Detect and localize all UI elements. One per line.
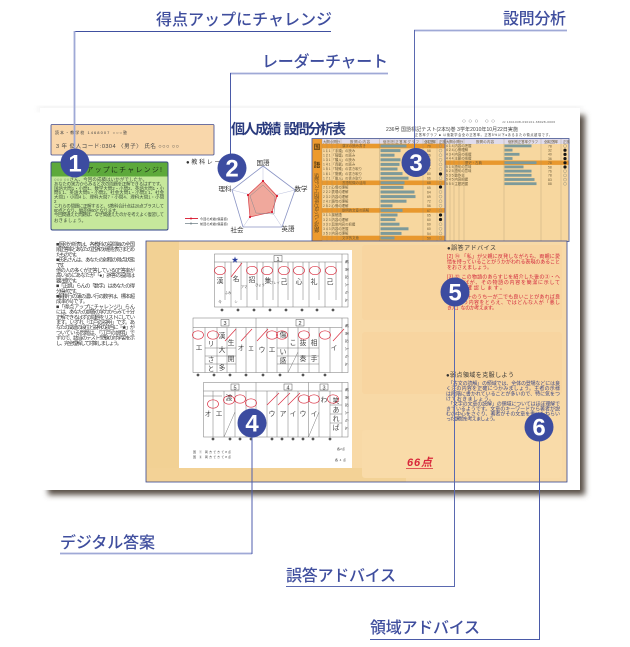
- callout: area advice: 領域アドバイス: [370, 614, 480, 638]
- radar chart: [218, 159, 308, 234]
- answer table: row 1: [214, 254, 350, 311]
- right table: scores: 88: [548, 182, 552, 186]
- panel: score-up challenge: 2: [54, 199, 57, 204]
- radar chart: 数学: [294, 184, 308, 193]
- left table: scores: 56: [427, 204, 431, 208]
- badge 4: [238, 408, 266, 438]
- answer table: row 3: あ: [333, 406, 340, 414]
- panel: score-up challenge: 問5 1、英語大問5・小問2、社会大問1・小問3 1、社会: [54, 189, 165, 196]
- panel: score-up challenge: 国語大問1・小問1、数学大問2・小問2、英語大問1・小: [54, 185, 165, 192]
- panel: student info: 読本・教学校 1468007 ○○○塾: [55, 129, 127, 135]
- panel: question analysis table: 正誤: [563, 139, 570, 144]
- right table: question rows: 4 4 4 主題の把握: [446, 156, 472, 161]
- answer table: row 2: 多: [219, 363, 226, 372]
- right table: scores: 32: [548, 148, 552, 152]
- left table: question rows: 2 2 2 表現の理解: [323, 189, 349, 194]
- left table: scores: 69: [427, 195, 431, 199]
- answer table: row 2: 傷: [280, 330, 287, 339]
- panel: question analysis table: 大問小問分: [323, 139, 341, 144]
- right table: question rows: 4 3 4 内容の把握: [446, 151, 472, 156]
- answer table: row 2: 大: [219, 345, 226, 354]
- header: student and test info: 正答率グラフ ■ 以後数学会全の正答率。正答5%以下●あるまたの領点超項です。: [415, 132, 552, 137]
- answer table: row 3: わ: [321, 396, 328, 404]
- left table: scores: 74: [427, 163, 431, 167]
- panel: score-up challenge: 今回間違えた問題は、なぜ間違えたのかを考えよく復習して: [54, 211, 164, 218]
- panel: question analysis table: 個別別正答率グラフ: [383, 139, 419, 144]
- panel: score-up challenge: 得点アップにチャレンジ!: [70, 165, 162, 174]
- left table: scores: [427, 144, 431, 240]
- text block: wrong-answer advice: き人」なのか考えます。: [447, 304, 497, 312]
- right table: scores: 78: [548, 161, 552, 165]
- left table: question rows: 文学的文章: [342, 235, 360, 240]
- text block: weak area advice: った課題を考えましょう。: [446, 416, 498, 422]
- panel: score-up challenge: [51, 162, 168, 230]
- radar chart: 理科: [218, 184, 232, 193]
- badge 5: 5: [448, 280, 462, 306]
- answer table: row 1: シ: [234, 300, 238, 304]
- panel: question analysis table: 個別別正答率グラフ: [508, 139, 538, 144]
- panel: question analysis table: 技能テスト正答率と知っている語彙: [313, 173, 320, 233]
- answer table: row 1: 心: [296, 277, 303, 286]
- answer table: row 3: 4: [286, 385, 290, 391]
- callout: area advice: [370, 430, 540, 640]
- right table: right or wrong marks: [563, 144, 567, 185]
- answer table: row 2: ウ: [259, 346, 265, 354]
- callout: question analysis: 設問分析: [503, 5, 566, 29]
- answer table: row 2: 手: [311, 354, 318, 363]
- text block: how to read the report: 順正答率とあなたの正誤の状態を表さまとめ: [56, 245, 135, 253]
- badge 3: [402, 148, 430, 177]
- left table: question rows: 3 4 3 内容の把握: [323, 226, 349, 231]
- text block: weak area advice: けておきましょう。: [446, 396, 494, 402]
- answer table: row 2: と: [208, 365, 214, 373]
- text block: wrong-answer advice: [3] ⑫ この物語のあらすじを紹介した後の③・へ: [447, 274, 560, 280]
- left table: scores: 67: [427, 209, 431, 213]
- badge 5: [440, 278, 470, 306]
- answer sheet notes: 各2点: [337, 446, 345, 451]
- panel: question analysis table: 正誤: [439, 139, 446, 144]
- badge 6: [524, 412, 554, 442]
- left table: score bars: [380, 144, 416, 240]
- left table: scores: 60: [427, 218, 431, 222]
- answer table: row 3: ア: [280, 410, 287, 418]
- left table: question rows: 1 6 1 「警察」の書き取り: [323, 171, 362, 176]
- answer table: row 1: 己: [327, 278, 334, 286]
- text block: how to read the report: なたの間違の段位と説明の該当に「★」が: [56, 323, 136, 331]
- callout: wrong-answer advice: [286, 295, 454, 586]
- badge 1: 1: [68, 150, 82, 178]
- text block: wrong-answer advice: 情を持っていることがうかがわれる表現のあること: [447, 258, 560, 266]
- answer sheet notes: [193, 446, 346, 462]
- answer table: row 2: 抜: [300, 338, 307, 347]
- answer table: row 2: 奏: [300, 354, 307, 363]
- answer table: row 1: 今: [218, 299, 222, 304]
- panel: question analysis table: 語: [314, 161, 321, 169]
- left table: scores: 60: [427, 223, 431, 227]
- text block: how to read the report: ■「正誤」らんの「数字」はあなたの得: [56, 282, 136, 290]
- answer table: row 1: ★: [232, 256, 238, 264]
- right table: question rows: 4 2 4 心情理解: [446, 147, 469, 152]
- answer table: row 2: 感: [280, 356, 287, 365]
- left table: question rows: 1 2 1 「隔壁」の読み: [323, 152, 356, 157]
- text block: wrong-answer advice: をおさえましょう。: [447, 264, 492, 271]
- answer table: row 2: オ: [238, 344, 245, 352]
- right table: scores: [548, 144, 552, 186]
- answer table: row 3: エ: [216, 411, 223, 418]
- panel: score-up challenge: 大問1・小問4 1、理科大問7・小問4、理科大問1・小問: [54, 194, 165, 201]
- answer table: row 2: エ: [196, 345, 203, 352]
- panel: score-up challenge: ○○○ ○○さん、今回の成績はいかがでしたか。: [54, 176, 147, 183]
- left table: scores: 64: [427, 190, 431, 194]
- text block: how to read the report: ずので、該当のテスト受験の対学習を示: [56, 334, 135, 342]
- text block: weak area advice: [446, 380, 560, 422]
- radar legend: 今回の成績(偏差値): [200, 216, 228, 221]
- text block: weak area advice: 「文字の文章の読解」の領域についてはほぼ理解で: [448, 400, 560, 408]
- answer table: row 1: プレイ: [270, 280, 280, 285]
- right table: scores: 78: [548, 174, 552, 178]
- left table: scores: 68: [427, 181, 431, 185]
- sheet: report page: [40, 108, 580, 490]
- text block: how to read the report: ついている問題は、「江戸の説明」で: [56, 328, 135, 336]
- answer table: row 3: 笑: [333, 396, 340, 405]
- badge 6: 6: [532, 414, 546, 442]
- answer table: row 3: れ: [333, 415, 340, 423]
- left table: question rows: 説明的文章の読解: [342, 208, 370, 213]
- text block: wrong-answer advice: いると確認します。: [447, 284, 505, 292]
- text block: how to read the report: [56, 240, 136, 347]
- header: student and test info: [386, 118, 555, 137]
- left table: question rows: 1 5 1 「特殊」の書き取り: [323, 166, 362, 171]
- text block: how to read the report: ■網掛行の薄の濃い行の数字は、標本超: [56, 292, 136, 300]
- answer table: row 3: 3: [322, 385, 326, 391]
- panel: student info: 3 年 個人コード:0304 〈男子〉 氏名 ○○○ ○○: [56, 142, 179, 150]
- right table: scores: 83: [548, 178, 552, 182]
- panel: question analysis table: 全体正答率: [424, 139, 437, 144]
- radar legend: [185, 216, 228, 226]
- left table: question rows: 2 3 2 内容の理解: [323, 194, 349, 199]
- right table: question rows: [446, 143, 483, 186]
- badge 2: 2: [225, 156, 239, 182]
- text block: wrong-answer advice: いという内容をとらえ、ではどんな人が「悪し: [447, 299, 560, 306]
- badge 2: [218, 154, 246, 182]
- answer table: row 1: 招: [249, 275, 256, 284]
- answer table: row 1: 解答記入らん: [344, 260, 350, 302]
- heading: weak area advice: ●弱点領域を克服しよう: [446, 371, 514, 379]
- text block: wrong-answer advice: [2] ⑭ 「私」が父親に反発しながらも、両親に愛: [447, 253, 560, 260]
- panel: question analysis table: 設問の内容: [476, 139, 495, 144]
- answer sheet notes: 国 ② 両方できて8点: [193, 454, 231, 459]
- right table: question rows: 4 1 4 内容の把握: [446, 143, 472, 148]
- panel: question analysis table: 国: [314, 143, 320, 151]
- right table: scores: 76: [548, 170, 552, 174]
- answer table: row 3: オ: [205, 410, 212, 418]
- right table: scores: 36: [548, 157, 552, 161]
- text block: how to read the report: です。: [56, 262, 67, 269]
- text block: how to read the report: ■氏名さんは、あなたの射程の得点状態: [56, 256, 136, 264]
- right table: question rows: 5 2 5 語句の意味: [446, 168, 472, 173]
- answer table: row 2: ェ: [248, 345, 254, 352]
- right table: score bars: [504, 144, 536, 185]
- answer table: row 1: 漢: [217, 276, 224, 285]
- answer table: row 1: 礼: [311, 277, 318, 286]
- text block: how to read the report: 高い)のにあなたが「●」誤答の設問は: [56, 271, 136, 279]
- header: student and test info: ○○○ ○○: [462, 118, 495, 125]
- left table: scores: 66: [427, 177, 431, 181]
- answer table: row 3: ウ: [300, 410, 306, 418]
- left table: scores: 54: [427, 232, 431, 236]
- answer table: row 3: 5: [233, 385, 237, 391]
- answer table: row 3: 渡: [226, 394, 233, 402]
- badge 3: 3: [409, 150, 423, 177]
- panel: student info: [51, 124, 214, 155]
- left table: scores: 58: [427, 149, 431, 153]
- text block: how to read the report: ます。いずれ「江戸の説明」です。あ: [56, 318, 135, 326]
- text block: how to read the report: たものです。: [56, 251, 80, 258]
- left table: question rows: 2 5 2 心情の理解: [323, 203, 349, 208]
- answer table: row 2: [192, 318, 350, 376]
- answer sheet notes: 国 ① 両方できて8点: [193, 449, 231, 454]
- radar heading: ●教科レーダー: [186, 158, 236, 166]
- left table: question rows: 3 2 3 内容の理解: [323, 217, 349, 222]
- left table: question rows: 言語知識の活用: [342, 180, 366, 185]
- digital answer sheet: [179, 250, 352, 468]
- left table: scores: 60: [427, 227, 431, 231]
- text block: weak area advice: 「古文の読解」の領域では、全体の登場などには良: [448, 380, 560, 387]
- text block: how to read the report: 分得点です。: [56, 287, 80, 295]
- right table: scores: 40: [548, 153, 552, 157]
- left table: scores: 72: [427, 200, 431, 204]
- answer table: row 1: ふみ: [225, 290, 232, 295]
- answer table: row 3: 解答記入らん: [344, 388, 350, 430]
- left table: question rows: 2 1 2 心情の理解: [323, 185, 349, 190]
- answer table: row 1: 1: [276, 257, 280, 263]
- header: student and test info: JJ 1941038-030101-68028-0006: [502, 120, 555, 124]
- right table: question rows: 5 1 5 語句の意味: [446, 164, 472, 169]
- panel: question analysis table: [312, 138, 570, 242]
- text block: weak area advice: きているようです。文章のキーワードから著者が説: [446, 406, 560, 412]
- sheet: drop shadow: [38, 106, 585, 495]
- right table: question rows: 歴史・古典: [465, 160, 483, 165]
- answer table: row 1: アマ: [241, 284, 247, 289]
- callout: digital answer sheet: デジタル答案: [60, 529, 155, 553]
- panel: score-up challenge: あなたの実力からみると次の問題を正解できるはずです。: [54, 180, 164, 187]
- answer table: row 1: 集: [265, 276, 272, 285]
- answer table: row 1: ひょう: [255, 282, 265, 287]
- title: 個人成績 設問分析表: [231, 121, 346, 137]
- text block: how to read the report: には、あなたの誤答の学力からみて十分: [56, 308, 136, 316]
- left table: scores: 65: [427, 186, 431, 190]
- answer table: row 3: ウ: [269, 410, 275, 418]
- text block: wrong-answer advice: のことばが、その物語の内容を簡潔に示して: [447, 279, 560, 286]
- left table: question rows: 1 1 1 「手順」の読み: [323, 148, 356, 153]
- panel: question analysis table: 全体正答率: [544, 139, 559, 144]
- callout: radar chart: レーダーチャート: [262, 48, 388, 72]
- left table: question rows: 3 5 3 内容の理解: [323, 231, 349, 236]
- left table: scores: 80: [427, 172, 431, 176]
- radar legend: 前回の成績(偏差値): [200, 221, 228, 226]
- radar chart: 社会: [230, 225, 244, 234]
- panel: answer sheet and advice background: [146, 241, 567, 482]
- answer table: row 2: 漢: [219, 331, 226, 340]
- text block: how to read the report: 成率(%)です。: [56, 297, 88, 305]
- answer table: row 3: ば: [333, 423, 340, 432]
- answer table: row 2: 3: [223, 321, 227, 327]
- answer table: row 3: [204, 382, 350, 440]
- callout: score-up challenge: 得点アップにチャレンジ: [156, 6, 332, 30]
- answer table: row 1: 名: [233, 274, 240, 283]
- answer table: row 2: 生: [228, 338, 235, 347]
- radar chart: 国語: [256, 159, 270, 167]
- left table: scores: 65: [427, 213, 431, 217]
- panel: score-up challenge: おきましょう。: [54, 217, 86, 224]
- panel: question analysis table: 設問の内容: [350, 139, 371, 144]
- answer table: row 3: イ: [311, 411, 317, 418]
- badge 1: [60, 148, 90, 178]
- answer table: row 1: 己: [281, 278, 288, 286]
- left table: scores: 68: [427, 158, 431, 162]
- heading: wrong-answer advice: ●誤答アドバイス: [447, 244, 496, 252]
- right table: question rows: 5 4 5 内容把握: [446, 177, 469, 182]
- text block: wrong-answer advice: [447, 253, 560, 312]
- left table: scores: 50: [427, 236, 431, 240]
- left table: question rows: 漢字の読み書き: [342, 143, 366, 148]
- left table: question rows: 2 4 2 語句の理解: [323, 198, 349, 203]
- radar chart: 英語: [282, 224, 295, 233]
- panel: score-up challenge: 80点となり、偏差値60となります。: [54, 207, 120, 214]
- callout: wrong-answer advice: 誤答アドバイス: [286, 562, 396, 586]
- text block: how to read the report: ■個別分析表は、各教科の設問毎の全国: [56, 240, 135, 248]
- text block: weak area advice: は段階に書かれていることが多いので、特に気をつ: [446, 390, 560, 398]
- text block: how to read the report: し、完全理解して対策しましょう。: [56, 339, 122, 347]
- answer table: row 2: こ: [290, 339, 296, 347]
- text block: weak area advice: く注の内容を正確につかみましょう。主者の示様: [446, 385, 560, 392]
- left table: question rows: 1 7 1 「故人」の書き取り: [323, 175, 362, 180]
- right table: scores: 58: [548, 165, 552, 169]
- right table: scores: 78: [548, 144, 552, 148]
- left table: question rows: 3 3 3 具体内容の把握: [323, 221, 356, 226]
- text block: how to read the report: ■「得点アップにチャレンジ!」らん: [56, 302, 135, 310]
- text block: how to read the report: 正解できるはずの問題をリストにしてい: [56, 313, 135, 321]
- answer table: row 2: 2: [298, 321, 302, 327]
- left table: right or wrong marks: [439, 144, 442, 240]
- right table: question rows: 5 5 5 主題把握: [446, 181, 469, 186]
- answer table: row 2: 開: [228, 355, 235, 363]
- left table: question rows: [323, 143, 370, 240]
- left table: question rows: 3 1 3 接続語: [323, 212, 342, 217]
- answer table: row 2: リ: [208, 341, 214, 348]
- answer sheet notes: 各4点: [335, 457, 346, 462]
- header: student and test info: 236号 国語標記テスト(2本5)巻 3学年2010年10月22日実施: [386, 126, 518, 133]
- text block: wrong-answer advice: [4] ⑮ 「十のうち一が二でも良いことがあれば良: [447, 294, 560, 300]
- left table: scores: 70: [427, 144, 431, 148]
- left table: scores: 77: [427, 167, 431, 171]
- answer table: row 2: い: [280, 348, 287, 356]
- answer table: row 2: エ: [269, 347, 276, 354]
- badge 4: 4: [245, 410, 259, 438]
- panel: question analysis table: 大問小問分: [446, 139, 464, 144]
- left table: question rows: 1 3 1 「隣人」の読み: [323, 157, 356, 162]
- answer table: row 2: 相: [311, 338, 318, 347]
- text block: how to read the report: 他の人の多くが正答している(正答率が: [56, 266, 136, 274]
- left table: scores: 76: [427, 154, 431, 158]
- answer table: row 3: イ: [290, 411, 296, 418]
- text block: weak area advice: むの中心をさぐり、著者がその文章を書いたねらい: [446, 410, 560, 418]
- panel: score-up challenge: これらの問題に正解すると、5教科合計点は20点プラスして: [54, 202, 164, 209]
- score: 66 points: 66点: [407, 456, 434, 469]
- left table: question rows: 1 4 1 「貢献」の読み: [323, 162, 356, 167]
- text block: how to read the report: 要注意です。: [56, 276, 80, 284]
- answer table: row 2: さ: [208, 356, 214, 364]
- right table: question rows: 5 3 5 動作主: [446, 172, 465, 177]
- answer table: row 2: 解答記入らん: [344, 324, 350, 366]
- answer table: row 2: イ: [331, 345, 337, 352]
